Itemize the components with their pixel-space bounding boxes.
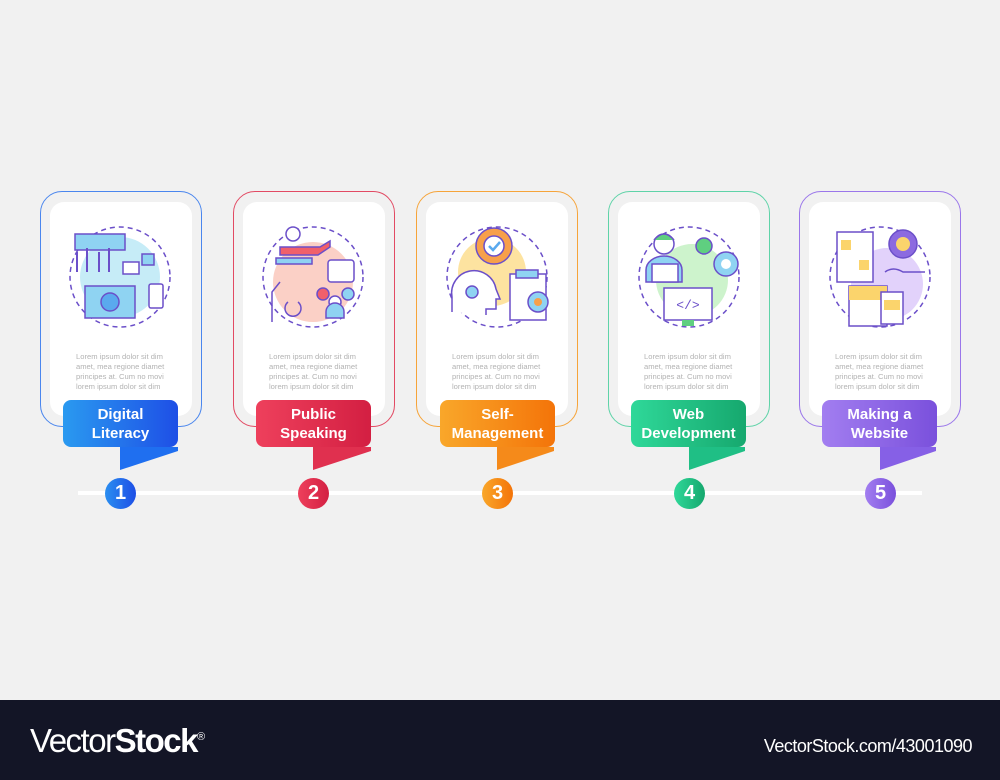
body text: Lorem ipsum dolor sit dim amet, mea regione diamet principes at. Cum no movi lorem ipsum dolor sit dim <box>76 352 164 391</box>
label: self-management: Self- <box>481 406 514 422</box>
number 2: 2 <box>308 482 319 504</box>
label: public speaking <box>256 400 371 447</box>
label: digital literacy: Digital <box>98 406 143 422</box>
body text: Lorem ipsum dolor sit dim amet, mea regione diamet principes at. Cum no movi lorem ipsum dolor sit dim <box>835 352 923 391</box>
icon: making a website <box>829 226 931 328</box>
number 4 <box>674 478 705 509</box>
label: digital literacy <box>63 400 178 447</box>
icon: public speaking <box>262 226 364 328</box>
footer bar <box>0 700 1000 780</box>
label: public speaking: Public <box>291 406 336 422</box>
footer logo: VectorStock® <box>30 722 204 759</box>
icon: web development: </> <box>676 298 700 313</box>
number 4: 4 <box>684 482 695 504</box>
number 3 <box>482 478 513 509</box>
label: making a website: Website <box>851 424 908 442</box>
label: public speaking: Speaking <box>280 424 347 442</box>
panel: making a website <box>799 191 961 427</box>
icon: self-management <box>446 226 549 328</box>
number 5: 5 <box>875 482 886 504</box>
panel: digital literacy <box>40 191 202 427</box>
label: making a website <box>822 400 937 447</box>
body text: Lorem ipsum dolor sit dim amet, mea regione diamet principes at. Cum no movi lorem ipsum dolor sit dim <box>644 352 732 391</box>
body text: Lorem ipsum dolor sit dim amet, mea regione diamet principes at. Cum no movi lorem ipsum dolor sit dim <box>452 352 540 391</box>
label: self-management <box>440 400 555 447</box>
label: digital literacy: Literacy <box>92 424 149 442</box>
icon: digital literacy <box>69 226 171 328</box>
number 1 <box>105 478 136 509</box>
label: web development: Web <box>673 406 704 422</box>
timeline line <box>78 491 922 495</box>
panel: self-management <box>416 191 578 427</box>
label: making a website: Making a <box>847 406 912 422</box>
label: self-management: Management <box>452 424 543 442</box>
panel: public speaking <box>233 191 395 427</box>
number 5 <box>865 478 896 509</box>
tails <box>120 447 936 470</box>
icon: web development <box>638 226 740 328</box>
number 3: 3 <box>492 482 503 504</box>
label: web development: Development <box>641 424 736 442</box>
panel: web development <box>608 191 770 427</box>
number 1: 1 <box>115 482 126 504</box>
number 2 <box>298 478 329 509</box>
body text: Lorem ipsum dolor sit dim amet, mea regione diamet principes at. Cum no movi lorem ipsum dolor sit dim <box>269 352 357 391</box>
label: web development <box>631 400 746 447</box>
footer url: VectorStock.com/43001090 <box>764 736 972 756</box>
